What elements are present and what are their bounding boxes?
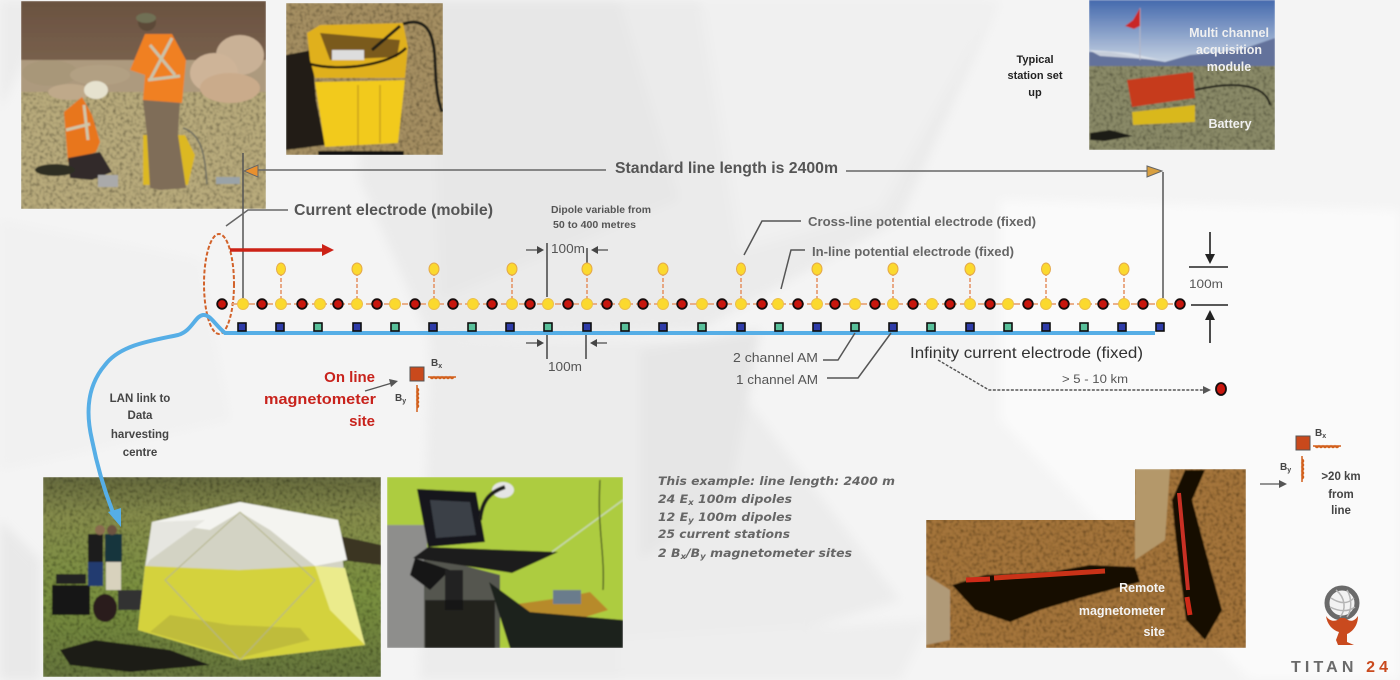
remote magnetometer icon bbox=[1260, 428, 1341, 488]
in-line electrode callout: In-line potential electrode (fixed) bbox=[812, 245, 1014, 259]
standard line length dimension bbox=[243, 153, 1163, 298]
survey summary: This example: line length: 2400 m bbox=[658, 474, 895, 488]
survey summary: 12 E bbox=[658, 510, 686, 524]
on-line magnetometer icon: y bbox=[402, 398, 406, 405]
infinity electrode link: > 5 - 10 km bbox=[1062, 374, 1128, 386]
on-line magnetometer icon: B bbox=[431, 358, 438, 369]
photo caption: remote site: site bbox=[1143, 625, 1165, 639]
survey summary: /B bbox=[684, 546, 700, 560]
dipole note: 50 to 400 metres bbox=[553, 220, 636, 231]
logo: Titan 24 bbox=[1291, 588, 1388, 676]
acquisition modules bbox=[238, 323, 1164, 331]
photo caption: remote site: Remote bbox=[1119, 581, 1165, 595]
LAN label: LAN link to bbox=[110, 393, 170, 405]
survey summary: 25 current stations bbox=[658, 527, 790, 541]
current electrodes bbox=[217, 299, 1185, 309]
on-line magnetometer label bbox=[264, 369, 376, 430]
on-line magnetometer icon: B bbox=[395, 393, 402, 404]
2 channel AM callout: 2 channel AM bbox=[733, 351, 818, 365]
lower 100m dimension: 100m bbox=[548, 360, 582, 374]
survey summary: 2 B bbox=[658, 546, 679, 560]
in-line potential electrodes bbox=[238, 298, 1168, 310]
photo caption: module: Multi channel bbox=[1189, 26, 1269, 40]
infinity electrode link bbox=[938, 360, 1226, 395]
survey summary: 24 E bbox=[658, 492, 686, 506]
right 100m dimension bbox=[1189, 232, 1228, 343]
photo: field crew with receiver bbox=[21, 1, 266, 209]
remote magnetometer icon: x bbox=[1322, 433, 1326, 440]
typical station label bbox=[1007, 54, 1063, 99]
top 100m dimension: 100m bbox=[551, 242, 585, 256]
cross-line electrodes bbox=[276, 263, 1129, 304]
cross-line electrode callout bbox=[744, 215, 1036, 255]
photo: data harvesting tent bbox=[43, 477, 381, 677]
photo caption: remote site: magnetometer bbox=[1079, 604, 1165, 618]
1 channel AM callout bbox=[736, 333, 891, 387]
on-line magnetometer label: site bbox=[349, 413, 375, 430]
photo: data harvesting centre interior bbox=[387, 477, 623, 648]
infinity electrode label: Infinity current electrode (fixed) bbox=[910, 345, 1143, 362]
on-line magnetometer icon bbox=[365, 358, 456, 412]
current electrode callout bbox=[226, 202, 493, 226]
direction arrow bbox=[230, 244, 334, 256]
typical station label: station set bbox=[1007, 70, 1063, 82]
LAN label: centre bbox=[123, 447, 157, 459]
on-line magnetometer label: magnetometer bbox=[264, 391, 376, 408]
survey summary: 100m dipoles bbox=[694, 492, 792, 506]
mobile electrode ellipse bbox=[204, 234, 234, 334]
LAN label: Data bbox=[128, 410, 153, 422]
typical station label: up bbox=[1028, 87, 1042, 99]
LAN cable with arrow bbox=[88, 315, 1155, 527]
survey line diagram bbox=[88, 54, 1361, 561]
on-line magnetometer label: On line bbox=[324, 369, 375, 386]
typical station label: Typical bbox=[1016, 54, 1054, 66]
photo caption: module: acquisition bbox=[1196, 43, 1262, 57]
remote magnetometer icon: B bbox=[1315, 428, 1322, 439]
lower 100m dimension bbox=[526, 335, 607, 374]
photo: yellow receiver case bbox=[286, 3, 443, 155]
remote magnetometer icon: B bbox=[1280, 462, 1287, 473]
remote magnetometer icon: y bbox=[1287, 467, 1291, 474]
survey summary: x bbox=[679, 552, 687, 561]
survey summary bbox=[658, 474, 895, 561]
photo caption: module: Battery bbox=[1208, 117, 1252, 131]
dipole note: Dipole variable from bbox=[551, 205, 651, 216]
logo: Titan 24: TITAN 24 bbox=[1291, 659, 1388, 676]
photo: typical station set up bbox=[1089, 0, 1275, 150]
standard line length dimension: Standard line length is 2400m bbox=[615, 160, 838, 177]
electrode wire bbox=[222, 303, 1180, 305]
remote distance label bbox=[1321, 471, 1361, 517]
1 channel AM callout: 1 channel AM bbox=[736, 373, 818, 387]
survey summary: magnetometer sites bbox=[706, 546, 852, 560]
dipole note bbox=[551, 205, 651, 231]
2 channel AM callout bbox=[733, 333, 855, 365]
remote distance label: >20 km bbox=[1321, 471, 1361, 483]
current electrode callout: Current electrode (mobile) bbox=[294, 202, 493, 219]
cross-line electrode callout: Cross-line potential electrode (fixed) bbox=[808, 215, 1036, 229]
right 100m dimension: 100m bbox=[1189, 277, 1223, 291]
LAN label: harvesting bbox=[111, 429, 169, 441]
remote distance label: line bbox=[1331, 505, 1351, 517]
top 100m dimension bbox=[526, 242, 608, 297]
survey summary: y bbox=[700, 552, 707, 561]
LAN label bbox=[110, 393, 170, 459]
remote distance label: from bbox=[1328, 489, 1354, 501]
in-line electrode callout bbox=[781, 245, 1014, 289]
on-line magnetometer icon: x bbox=[438, 363, 442, 370]
photo caption: module bbox=[1189, 26, 1269, 131]
photo: remote magnetometer site bbox=[926, 469, 1246, 648]
survey summary: y bbox=[688, 516, 695, 525]
photo caption: module: module bbox=[1207, 60, 1251, 74]
survey summary: 100m dipoles bbox=[694, 510, 792, 524]
survey summary: x bbox=[687, 498, 695, 507]
photo caption: remote site bbox=[1079, 581, 1165, 639]
